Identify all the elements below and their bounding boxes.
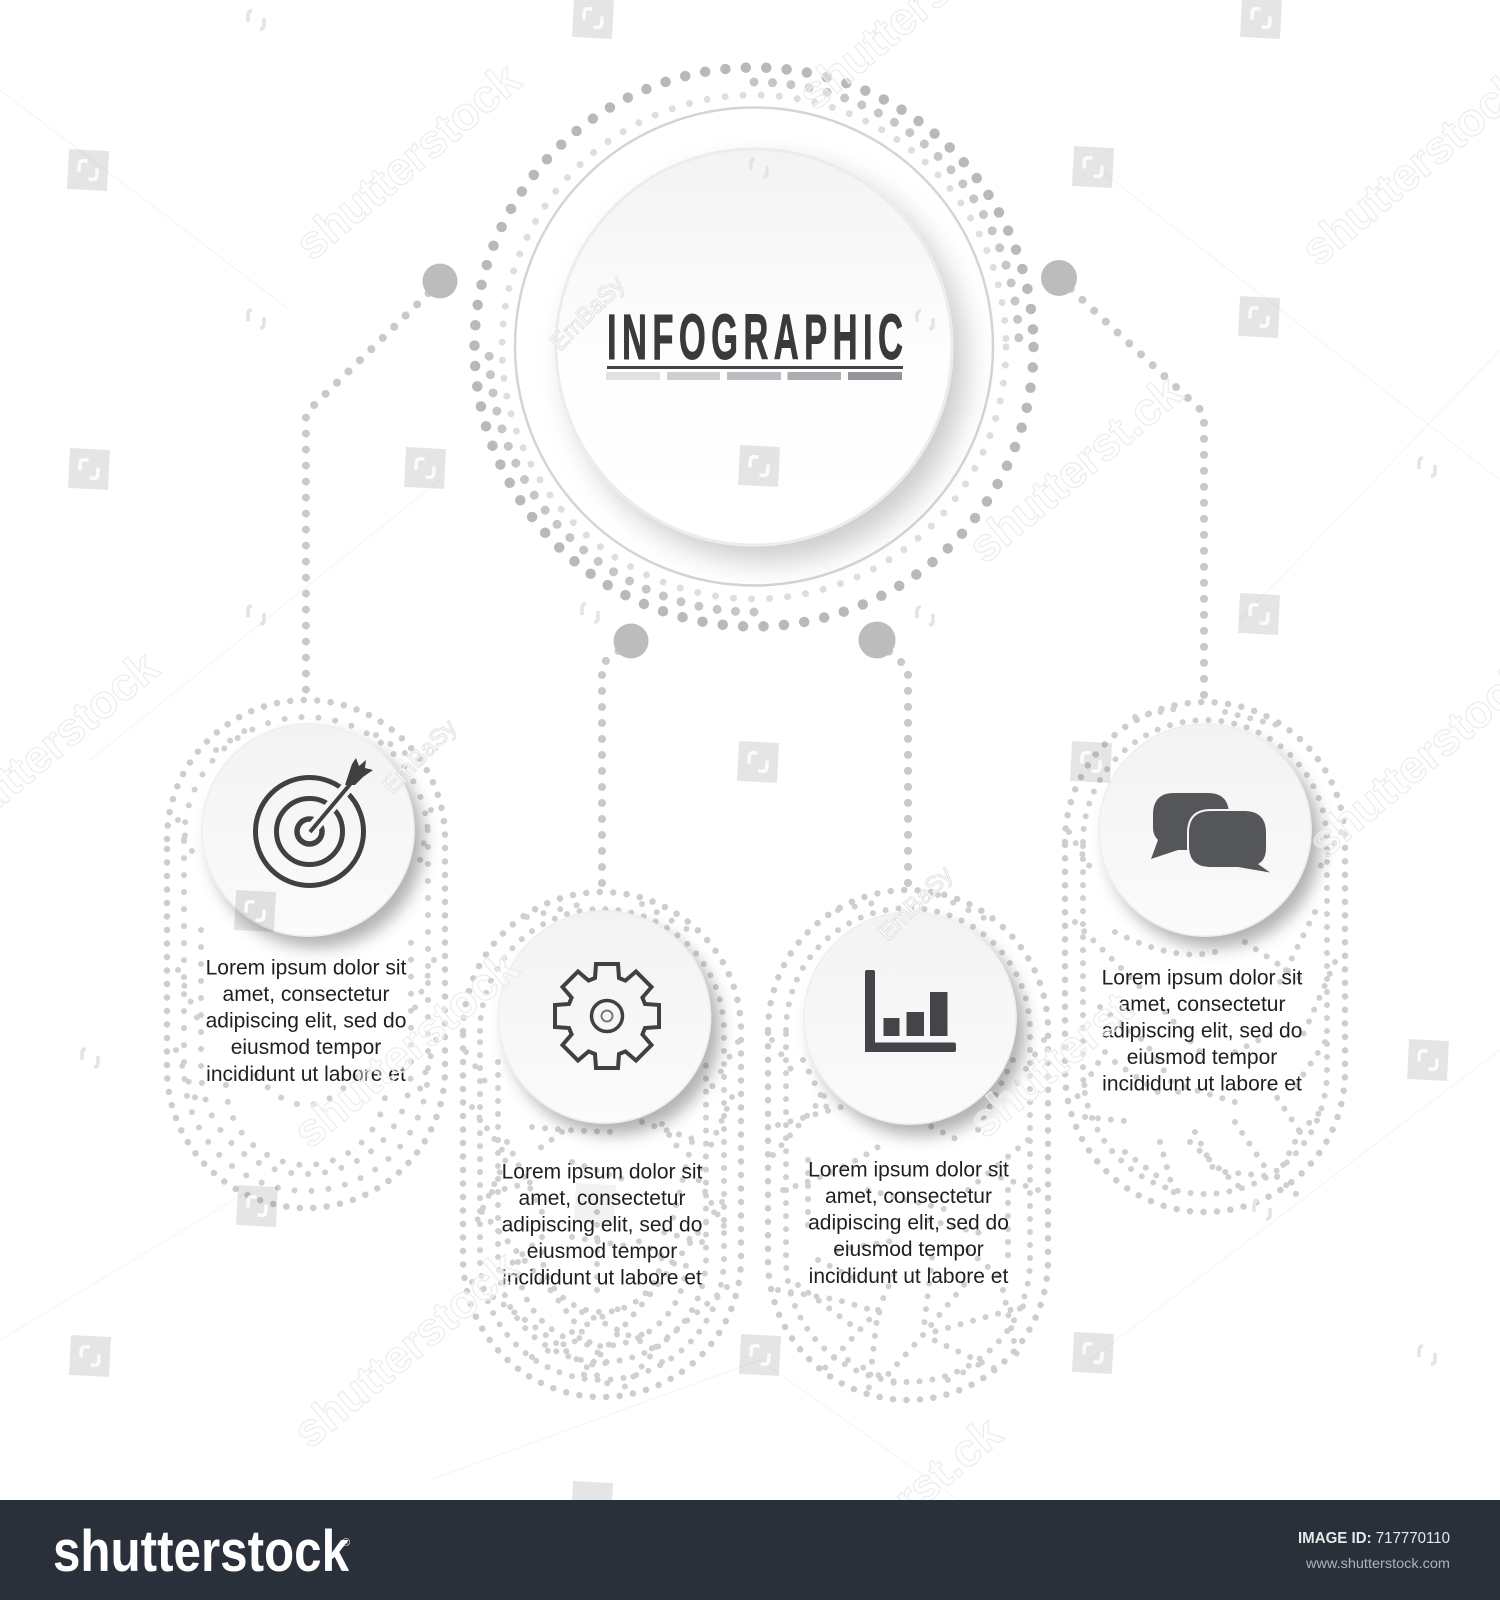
footer registered mark: ® bbox=[342, 1537, 350, 1549]
disc: chart bbox=[804, 912, 1016, 1124]
dotted capsule: chart bbox=[768, 890, 1048, 1400]
text: chat: adipiscing elit, sed do bbox=[1102, 1020, 1302, 1042]
text: target: adipiscing elit, sed do bbox=[206, 1010, 406, 1032]
watermark: contributor name bbox=[377, 271, 958, 946]
icon: speech bubbles bbox=[1151, 793, 1270, 872]
main disc bbox=[556, 149, 952, 545]
dotted capsule: gear bbox=[463, 892, 741, 1397]
text: chart: amet, consectetur bbox=[825, 1185, 992, 1208]
node dot: right bbox=[1041, 260, 1077, 296]
text: gear: adipiscing elit, sed do bbox=[502, 1214, 702, 1236]
watermark: shutterstock text: shutterstock bbox=[283, 1240, 528, 1458]
watermark: shutterstock text: shutterst bbox=[958, 981, 1142, 1148]
footer image id: IMAGE ID: 717770110 bbox=[1298, 1530, 1450, 1547]
text: chart: adipiscing elit, sed do bbox=[808, 1212, 1009, 1234]
disc: gear bbox=[498, 911, 710, 1123]
connector: left dotted line bbox=[306, 282, 440, 694]
text: target: eiusmod tempor bbox=[231, 1036, 381, 1059]
title underline bbox=[607, 366, 903, 369]
panel: chat bbox=[1065, 702, 1345, 1212]
dotted ring: outer bbox=[474, 68, 1034, 626]
text: target: Lorem ipsum dolor sit bbox=[206, 956, 407, 980]
node dot: lower left bbox=[614, 624, 648, 658]
text: chart: incididunt ut labore et bbox=[809, 1265, 1008, 1288]
text: chart: eiusmod tempor bbox=[833, 1238, 984, 1261]
connector: right dotted line bbox=[1059, 278, 1204, 700]
text: gear: amet, consectetur bbox=[519, 1187, 685, 1210]
text: chat: incididunt ut labore et bbox=[1102, 1072, 1302, 1096]
icon: gear bbox=[555, 964, 659, 1068]
icon: target with arrow bbox=[256, 758, 373, 886]
text: chat: Lorem ipsum dolor sit bbox=[1102, 966, 1303, 990]
text: gear bbox=[502, 1160, 703, 1290]
watermark: shutterstock text: shutterstock bbox=[283, 940, 528, 1158]
panel: gear bbox=[463, 892, 741, 1397]
node dot: lower right bbox=[858, 622, 896, 658]
watermark: contributor name: EmBaSy bbox=[873, 861, 958, 946]
text: chat: eiusmod tempor bbox=[1127, 1046, 1277, 1069]
text: chart: Lorem ipsum dolor sit bbox=[808, 1158, 1009, 1182]
title segmented bar bbox=[606, 372, 902, 380]
text: target: incididunt ut labore et bbox=[206, 1063, 406, 1086]
watermark: contributor name: EmBaSy bbox=[377, 714, 462, 799]
text: target: amet, consectetur bbox=[223, 983, 389, 1006]
watermark: shutterstock text: shutterstock bbox=[285, 52, 530, 270]
dotted ring: inner bbox=[502, 95, 1006, 599]
outer thin ring bbox=[515, 108, 993, 586]
footer bar bbox=[0, 1500, 1500, 1600]
text: gear: incididunt ut labore et bbox=[502, 1266, 702, 1290]
text: gear: eiusmod tempor bbox=[527, 1240, 677, 1263]
text: chat: amet, consectetur bbox=[1119, 993, 1285, 1016]
watermark: small logos bbox=[82, 11, 1435, 1364]
text: chart bbox=[808, 1158, 1009, 1288]
panel: chart bbox=[768, 890, 1048, 1400]
connector: chart dotted line bbox=[877, 641, 908, 888]
text: target bbox=[206, 956, 407, 1086]
connector: gear dotted line bbox=[602, 641, 631, 888]
panel: target bbox=[167, 700, 445, 1208]
dotted capsule: chat bbox=[1065, 702, 1345, 1212]
watermark: contributor name: EmBaSy bbox=[545, 271, 630, 356]
dotted capsule: target bbox=[167, 700, 445, 1208]
disc: chat bbox=[1099, 724, 1311, 936]
text: gear: Lorem ipsum dolor sit bbox=[502, 1160, 703, 1184]
footer url: www.shutterstock.com bbox=[1305, 1555, 1450, 1571]
node dot: left bbox=[422, 264, 458, 298]
dotted ring: middle arcs bbox=[489, 82, 1019, 612]
title text: INFOGRAPHIC bbox=[607, 301, 903, 373]
disc: target bbox=[202, 724, 414, 936]
text: chat bbox=[1102, 966, 1303, 1096]
icon: bar chart bbox=[865, 970, 956, 1052]
footer logo: shutterstock bbox=[53, 1519, 350, 1584]
central badge bbox=[474, 68, 1034, 626]
watermark: shutterstock text: shutterst.ck bbox=[958, 365, 1191, 573]
